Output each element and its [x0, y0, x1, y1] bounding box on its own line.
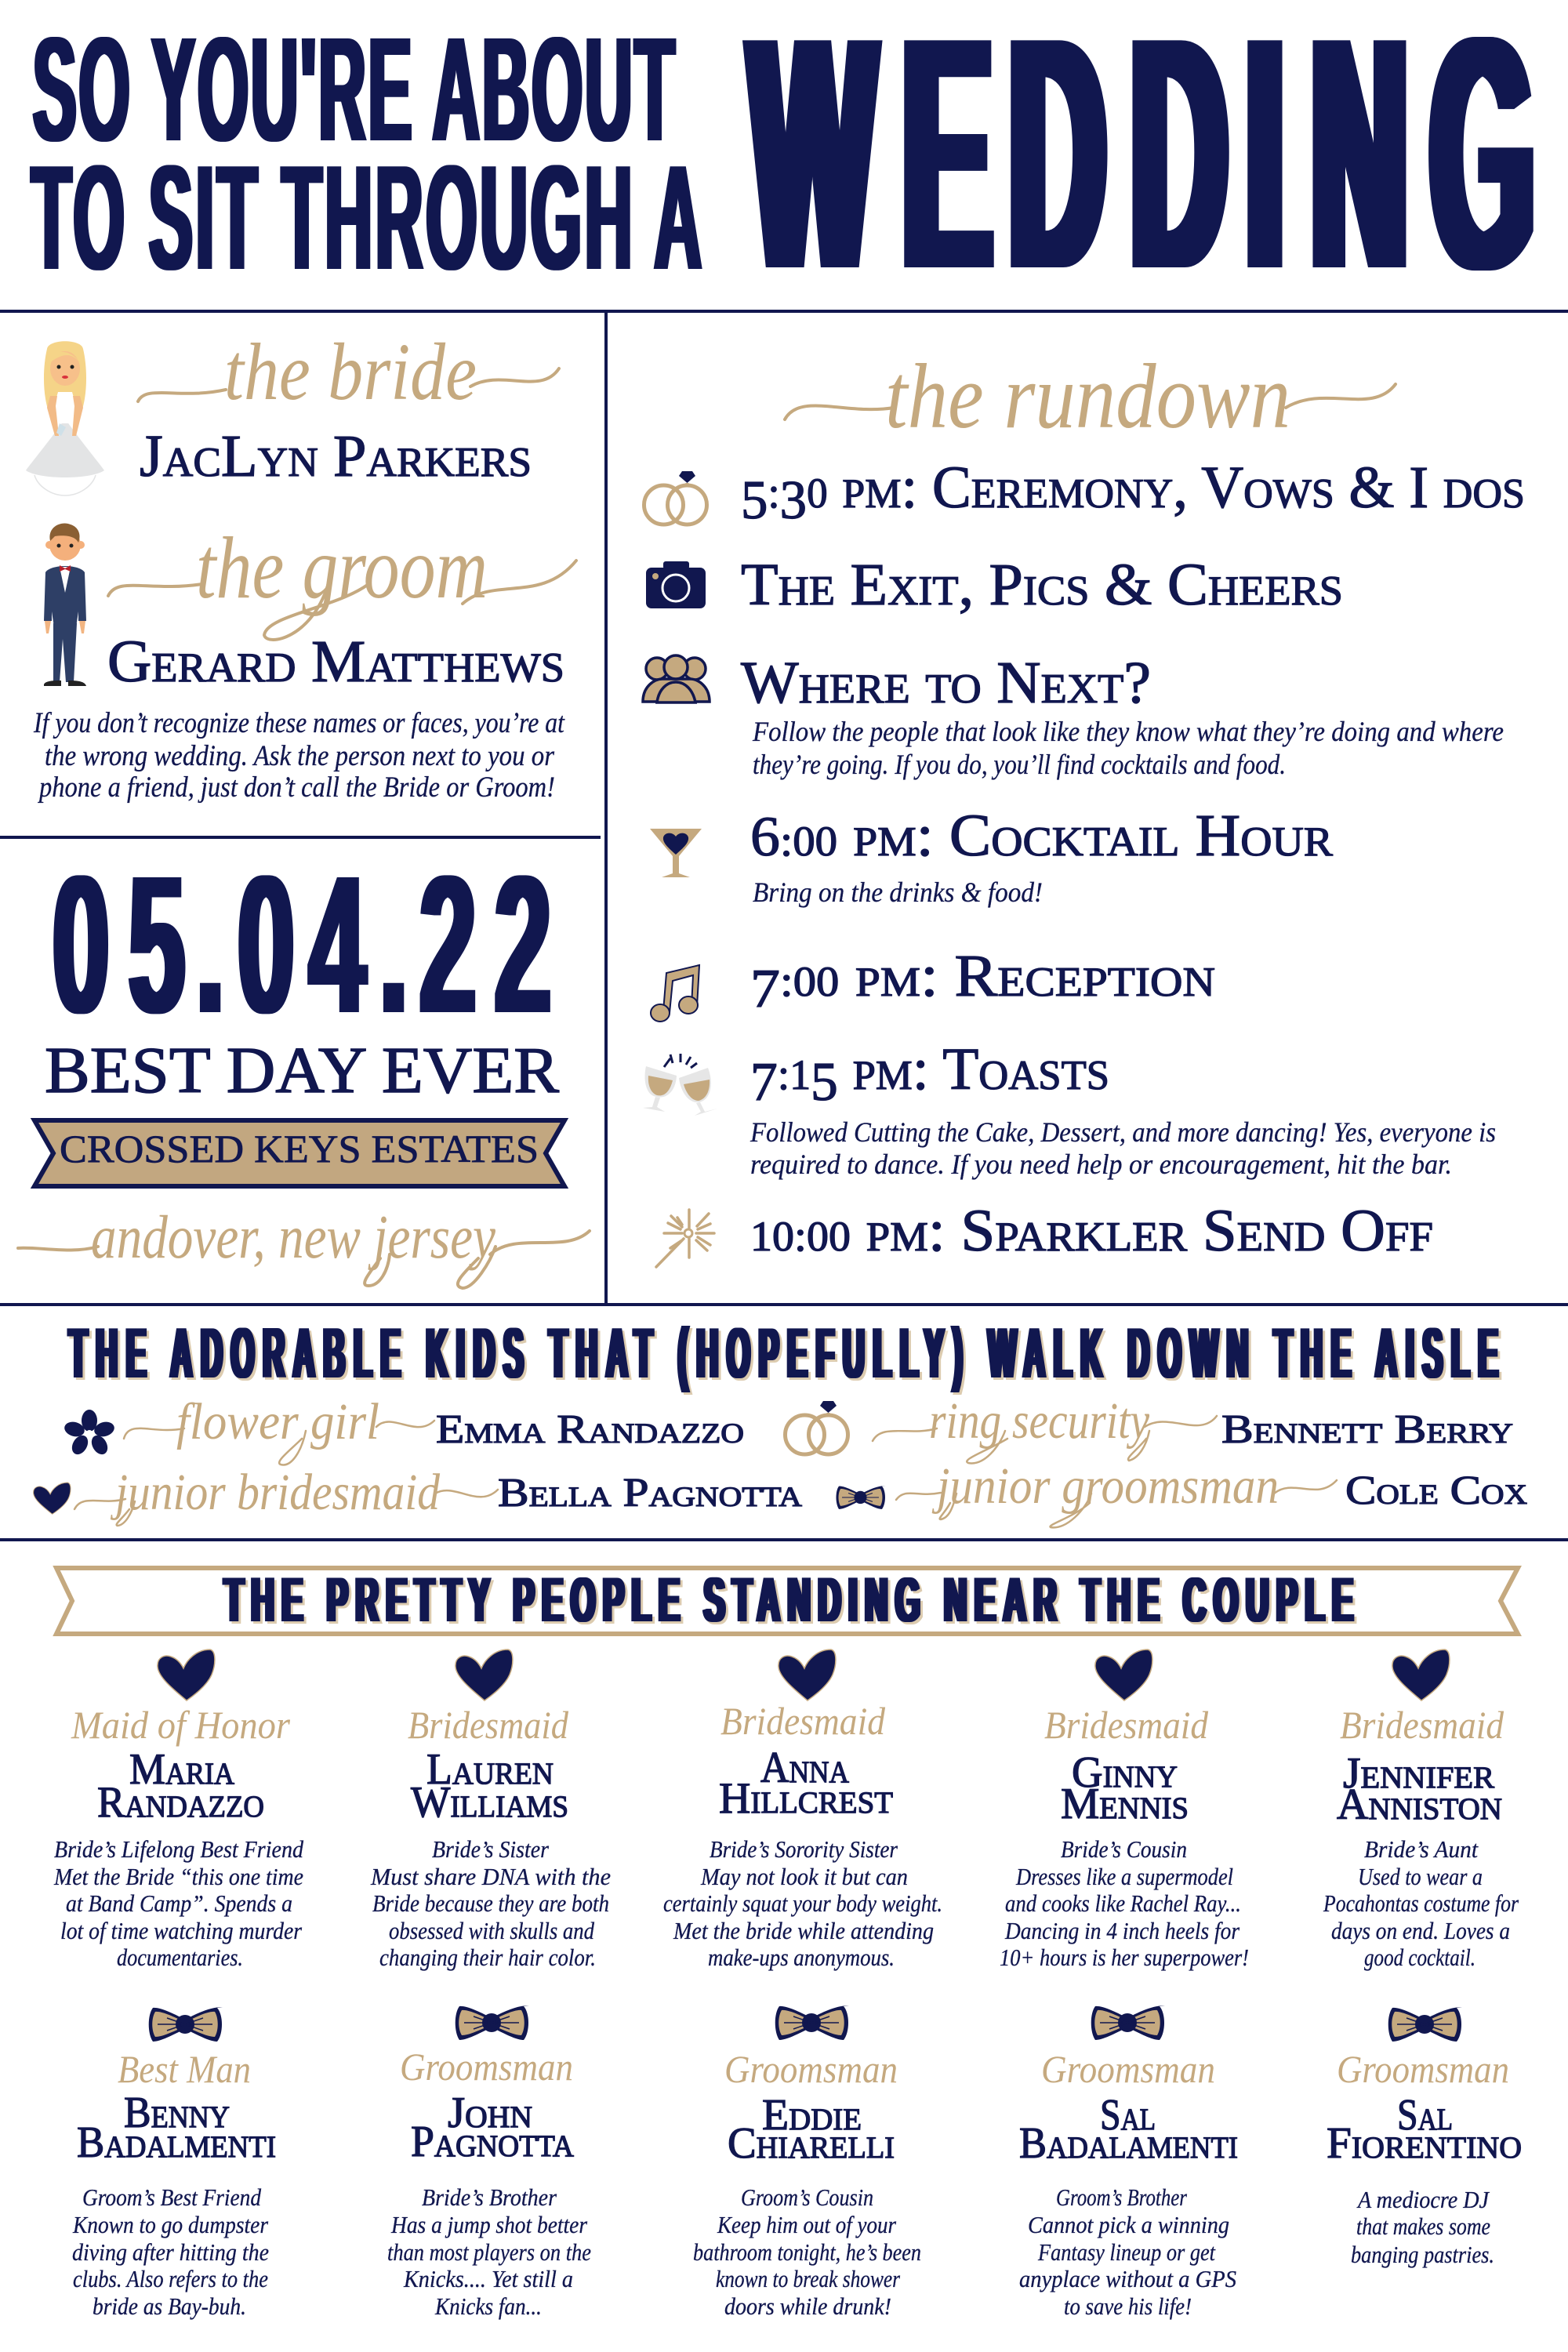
card: Sal Badalamenti: Cannot pick a winning — [1028, 2211, 1229, 2238]
card: Benny Badalmenti: Known to go dumpster — [72, 2211, 269, 2238]
card: Maria Randazzo: lot of time watching murder — [60, 1917, 303, 1944]
item: ceremony: pm: Ceremony, Vows & I dos — [843, 455, 1537, 521]
card: Lauren Williams: Bride because they are both — [372, 1889, 609, 1917]
card: Anna Hillcrest: make-ups anonymous. — [708, 1944, 895, 1971]
card: John Pagnotta: Knicks fan... — [434, 2292, 542, 2320]
card: Jennifer Anniston — [1323, 1650, 1519, 1971]
card: Sal Fiorentino: Sal — [1397, 2091, 1453, 2140]
icon: heart small — [34, 1483, 71, 1514]
icon: people — [643, 655, 710, 702]
item: ceremony: 0 — [807, 470, 828, 517]
card: Jennifer Anniston: days on end. Loves a — [1331, 1917, 1510, 1944]
item: reception: 00 pm: Reception — [793, 943, 1186, 1009]
card: Maria Randazzo: at Band Camp”. Spends a — [66, 1889, 292, 1917]
item: toasts — [750, 1036, 1496, 1180]
icon: rings small — [786, 1401, 848, 1454]
card: Lauren Williams: obsessed with skulls and — [389, 1917, 594, 1944]
label: the groom — [108, 520, 576, 640]
item: where to next — [741, 650, 1504, 780]
card: Ginny Mennis: Bride’s Cousin — [1061, 1835, 1187, 1863]
card: Jennifer Anniston: Bridesmaid — [1340, 1703, 1504, 1747]
card: Lauren Williams: Must share DNA with the — [370, 1863, 611, 1890]
card: Benny Badalmenti: clubs. Also refers to the — [73, 2265, 268, 2292]
item: sparkler send off: 10:00 pm: Sparkler Send Off — [750, 1198, 1433, 1264]
note: where to next: they’re going. If you do, you’ll find cocktails and food. — [753, 749, 1286, 780]
card: Anna Hillcrest: Met the bride while attending — [673, 1917, 934, 1944]
name: junior groomsman: Cole Cox — [1345, 1468, 1527, 1513]
heading: the rundown: the rundown — [885, 345, 1290, 448]
note: names and faces — [33, 707, 565, 804]
card: Lauren Williams: Bride’s Sister — [432, 1835, 550, 1863]
card: Lauren Williams: Williams — [411, 1778, 568, 1827]
panel dividers — [0, 311, 1568, 1540]
card: Jennifer Anniston: Anniston — [1337, 1780, 1502, 1829]
card: Jennifer Anniston: good cocktail. — [1364, 1944, 1475, 1971]
label: flower girl — [124, 1393, 434, 1465]
card: Eddie Chiarelli: Groomsman — [724, 2047, 898, 2091]
icon: sparkler — [656, 1210, 714, 1267]
item: toasts: pm — [838, 1036, 913, 1102]
note: names and faces: the wrong wedding. Ask the person next to you or — [45, 740, 555, 772]
name: ring security: Bennett Berry — [1221, 1407, 1513, 1452]
card: Jennifer Anniston: Pocahontas costume for — [1323, 1889, 1519, 1917]
label: the groom: the groom — [196, 520, 488, 617]
name: junior bridesmaid: Bella Pagnotta — [498, 1471, 802, 1515]
note: names and faces: If you don’t recognize these names or faces, you’re at — [33, 707, 565, 739]
card: Sal Badalamenti: to save his life! — [1064, 2292, 1192, 2320]
card: Lauren Williams: Bridesmaid — [408, 1703, 569, 1747]
card: John Pagnotta — [387, 2005, 591, 2320]
icon: groom — [44, 524, 86, 686]
card: Benny Badalmenti — [72, 2007, 276, 2320]
card: Eddie Chiarelli: Groom’s Cousin — [741, 2183, 873, 2211]
card: Benny Badalmenti: Benny — [124, 2089, 230, 2137]
note: where to next: Follow the people that look like they know what they’re doing and where — [752, 716, 1504, 747]
item: toasts: : Toasts — [913, 1036, 1111, 1102]
item: ceremony: 5 — [741, 470, 768, 531]
card: John Pagnotta: Groomsman — [400, 2045, 573, 2089]
card: Sal Badalamenti — [1019, 2005, 1238, 2320]
item: ceremony: : — [768, 469, 780, 517]
card: Anna Hillcrest: Bride’s Sorority Sister — [710, 1835, 898, 1863]
card: Benny Badalmenti: bride as Bay-buh. — [93, 2292, 246, 2320]
item: toasts: 1 — [789, 1051, 811, 1098]
item: toasts: : — [778, 1051, 789, 1099]
title lead line 2: TO SIT THROUGH A — [31, 135, 702, 301]
title lead line 1: SO YOU'RE ABOUT — [33, 6, 674, 172]
item: cocktail hour — [750, 803, 1334, 908]
card: John Pagnotta: Knicks.... Yet still a — [403, 2265, 573, 2292]
card: Sal Badalamenti: anyplace without a GPS — [1019, 2265, 1236, 2292]
script: location: andover, new jersey — [91, 1203, 495, 1271]
item: cocktail hour: Bring on the drinks & food! — [753, 877, 1043, 908]
banner: wedding party heading: THE PRETTY PEOPLE STANDING NEAR THE COUPLE — [224, 1564, 1353, 1635]
label: junior bridesmaid: junior bridesmaid — [110, 1464, 441, 1521]
card: Maria Randazzo: Maid of Honor — [71, 1703, 291, 1747]
note: where to next — [752, 716, 1504, 780]
card: Anna Hillcrest: Bridesmaid — [720, 1699, 886, 1743]
card: Maria Randazzo — [53, 1650, 303, 1971]
label: the bride: the bride — [224, 327, 477, 417]
banner: venue — [34, 1120, 564, 1186]
label: junior groomsman: junior groomsman — [931, 1457, 1279, 1515]
name: bride: JacLyn Parkers — [140, 423, 532, 489]
card: Anna Hillcrest: certainly squat your body weight. — [663, 1889, 942, 1917]
panel: wedding party — [53, 1564, 1522, 2320]
card: Eddie Chiarelli: doors while drunk! — [724, 2292, 891, 2320]
label: the bride — [138, 327, 559, 417]
item: cocktail hour: 6:00 pm: Cocktail Hour — [750, 803, 1334, 869]
item: toasts: 5 — [811, 1052, 838, 1112]
item: toasts: Followed Cutting the Cake, Dessert, and more dancing! Yes, everyone is — [750, 1116, 1496, 1148]
card: Benny Badalmenti: Best Man — [118, 2047, 251, 2091]
card: Jennifer Anniston: Used to wear a — [1358, 1863, 1483, 1890]
title — [31, 0, 1534, 337]
card: Benny Badalmenti: Badalmenti — [77, 2118, 276, 2167]
card: Ginny Mennis: Bridesmaid — [1044, 1703, 1209, 1747]
card: Ginny Mennis: Mennis — [1061, 1780, 1189, 1828]
card: Sal Badalamenti: Fantasy lineup or get — [1037, 2238, 1216, 2266]
card: Benny Badalmenti: Groom’s Best Friend — [82, 2183, 261, 2211]
card: Ginny Mennis: and cooks like Rachel Ray... — [1005, 1889, 1241, 1917]
card: Sal Fiorentino — [1327, 2007, 1522, 2268]
panel: date and venue — [18, 836, 590, 1288]
item: toasts: required to dance. If you need help or encouragement, hit the bar. — [750, 1149, 1452, 1180]
icon: camera — [646, 561, 706, 608]
card: Jennifer Anniston: Bride’s Aunt — [1364, 1835, 1479, 1863]
card: John Pagnotta: Bride’s Brother — [422, 2183, 557, 2211]
card: Maria Randazzo: Randazzo — [97, 1778, 264, 1827]
card: Sal Badalamenti: Groomsman — [1041, 2047, 1215, 2091]
banner: venue: CROSSED KEYS ESTATES — [60, 1127, 539, 1171]
card: John Pagnotta: Has a jump shot better — [390, 2211, 588, 2238]
panel: kids — [34, 1313, 1527, 1527]
icon: bow tie small — [837, 1486, 886, 1509]
card: Sal Fiorentino: Fiorentino — [1327, 2119, 1522, 2168]
item: exit and pics: The Exit, Pics & Cheers — [741, 552, 1343, 618]
icon: flower — [63, 1410, 116, 1457]
card: Eddie Chiarelli — [693, 2005, 921, 2320]
card: Anna Hillcrest: Hillcrest — [719, 1774, 893, 1823]
icon: rings — [644, 471, 707, 524]
label: flower girl: flower girl — [176, 1393, 379, 1450]
card: Eddie Chiarelli: bathroom tonight, he’s been — [693, 2238, 921, 2266]
card: Maria Randazzo: Maria — [129, 1745, 234, 1794]
card: Sal Fiorentino: Groomsman — [1337, 2047, 1509, 2091]
icon: martini — [650, 829, 702, 877]
tagline: BEST DAY EVER — [45, 1034, 559, 1107]
icon: music — [651, 965, 699, 1022]
card: Jennifer Anniston: Jennifer — [1343, 1749, 1494, 1798]
card: Anna Hillcrest: Anna — [760, 1744, 849, 1792]
card: Ginny Mennis: Dancing in 4 inch heels for — [1004, 1917, 1240, 1944]
label: ring security: ring security — [929, 1392, 1150, 1450]
name: groom: Gerard Matthews — [107, 629, 564, 695]
card: Sal Badalamenti: Sal — [1100, 2091, 1156, 2140]
card: Sal Fiorentino: banging pastries. — [1351, 2241, 1494, 2268]
card: Sal Badalamenti: Badalamenti — [1019, 2119, 1238, 2168]
card: John Pagnotta: than most players on the — [387, 2238, 591, 2266]
card: Lauren Williams: Lauren — [426, 1745, 554, 1794]
card: Ginny Mennis — [1000, 1650, 1249, 1971]
card: Sal Fiorentino: A mediocre DJ — [1356, 2186, 1490, 2213]
card: Benny Badalmenti: diving after hitting the — [72, 2238, 269, 2266]
card: Maria Randazzo: Met the Bride “this one time — [53, 1863, 303, 1890]
card: Ginny Mennis: 10+ hours is her superpower! — [1000, 1944, 1249, 1971]
card: Eddie Chiarelli: Keep him out of your — [717, 2211, 897, 2238]
name: flower girl: Emma Randazzo — [436, 1407, 744, 1452]
card: Eddie Chiarelli: known to break shower — [716, 2265, 901, 2292]
item: reception: 7 — [750, 959, 780, 1019]
card: Ginny Mennis: Dresses like a supermodel — [1015, 1863, 1233, 1890]
icon: bride — [26, 341, 104, 495]
script: location — [18, 1203, 590, 1288]
card: Sal Badalamenti: Groom’s Brother — [1056, 2183, 1188, 2211]
card: Eddie Chiarelli: Chiarelli — [728, 2119, 895, 2168]
card: Anna Hillcrest: May not look it but can — [700, 1863, 908, 1890]
card: Maria Randazzo: Bride’s Lifelong Best Friend — [54, 1835, 303, 1863]
item: reception: : — [780, 957, 793, 1006]
panel: the rundown — [643, 345, 1525, 1267]
card: Lauren Williams — [370, 1650, 611, 1971]
card: Maria Randazzo: documentaries. — [117, 1944, 243, 1971]
item: where to next: Where to Next? — [741, 650, 1151, 716]
card: Eddie Chiarelli: Eddie — [762, 2091, 862, 2140]
date: 05.04.22 — [53, 836, 551, 1054]
card: Ginny Mennis: Ginny — [1072, 1748, 1178, 1797]
heading: kids: THE ADORABLE KIDS THAT (HOPEFULLY) WALK DOWN THE AISLE — [69, 1313, 1498, 1393]
card: Lauren Williams: changing their hair color. — [379, 1944, 596, 1971]
panel: bride and groom — [26, 327, 576, 804]
card: Sal Fiorentino: that makes some — [1356, 2212, 1490, 2240]
note: names and faces: phone a friend, just don’t call the Bride or Groom! — [37, 771, 555, 804]
card: John Pagnotta: Pagnotta — [411, 2118, 574, 2166]
item: toasts: 7 — [750, 1052, 778, 1112]
icon: toast — [643, 1054, 717, 1116]
card: Anna Hillcrest — [663, 1650, 942, 1971]
item: ceremony: 3 — [780, 470, 807, 531]
card: John Pagnotta: John — [448, 2089, 532, 2137]
label: ring security — [873, 1392, 1217, 1463]
